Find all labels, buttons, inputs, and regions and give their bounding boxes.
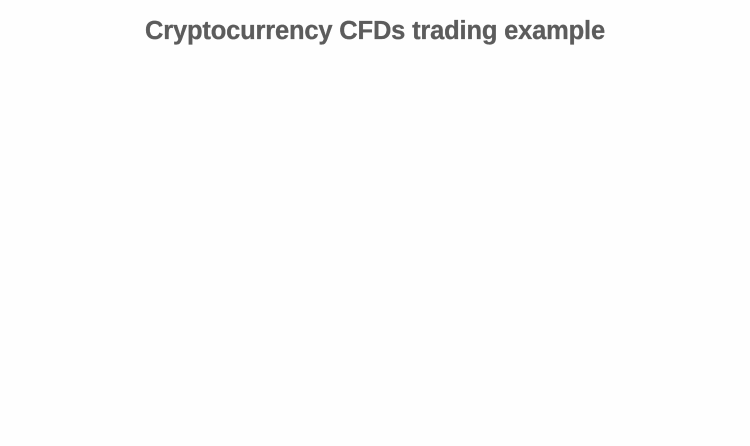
- title: Cryptocurrency CFDs trading example: [145, 17, 605, 45]
